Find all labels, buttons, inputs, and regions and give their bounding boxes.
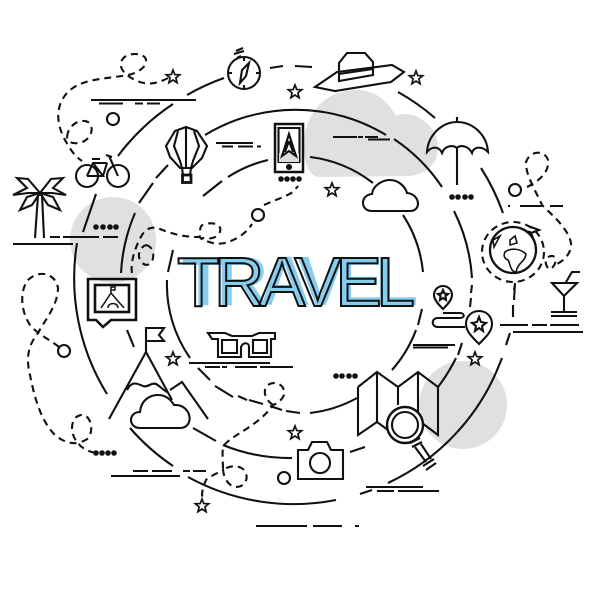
concentric ring arcs	[74, 66, 515, 504]
icon: dots	[93, 176, 474, 456]
icon: globe	[490, 226, 539, 273]
route waypoint circles	[58, 113, 521, 484]
icon: location pins	[433, 286, 492, 344]
icon: camera	[298, 442, 365, 479]
title: TRAVEL: TRAVEL	[182, 242, 418, 320]
icon: cloud	[363, 180, 418, 211]
icon: picture frame	[88, 279, 136, 327]
icon: palm tree	[13, 178, 66, 238]
icon: umbrella	[427, 117, 488, 185]
icon: phone	[275, 124, 303, 172]
stars	[166, 70, 482, 512]
icon: hat	[315, 53, 404, 91]
icon: bicycle	[76, 155, 129, 187]
short horizontal lines	[13, 100, 583, 526]
icon: compass	[228, 48, 260, 89]
icon: mountain with flag	[109, 328, 208, 428]
gray background blobs	[70, 90, 507, 449]
route dashed lines	[22, 54, 571, 497]
icon: cocktail	[551, 272, 580, 316]
title: TRAVEL: TRAVEL	[177, 243, 415, 321]
icon: glasses	[208, 333, 275, 357]
icon: balloon	[166, 127, 207, 182]
icon: folded map with magnifier	[358, 372, 438, 470]
